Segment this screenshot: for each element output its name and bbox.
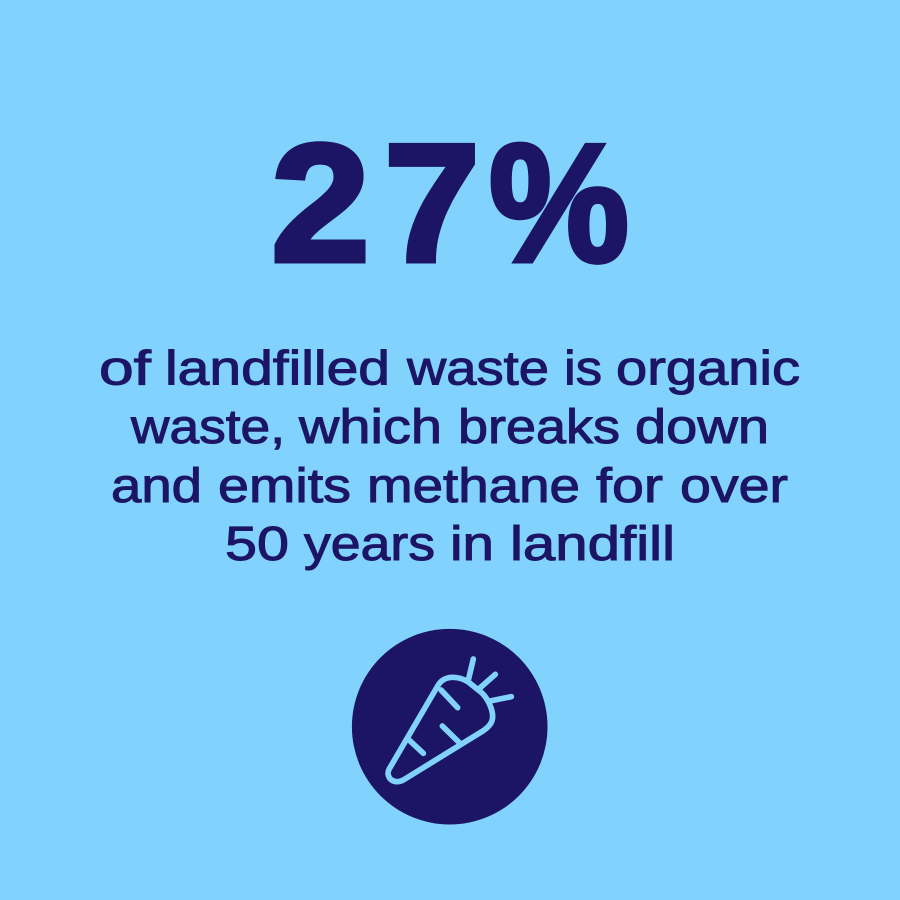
description text block: waste [406,342,549,396]
description text block: over [680,460,788,513]
description text block: years [304,518,435,571]
headline statistic: 27% [271,109,629,297]
description text block: landfill [510,518,675,571]
headline statistic: 27%: 2 [271,109,370,297]
description text block [99,342,800,571]
description text block: emits [218,460,351,513]
icon background circle [352,629,548,824]
carrot outline [388,659,511,782]
description text block: breaks [458,401,620,454]
headline statistic: 27%: % [489,109,629,297]
description text block: landfilled [165,342,390,396]
description text block: methane [367,460,580,513]
description text block: 50 [225,518,289,571]
description text block: which [298,401,442,454]
description text block: in [450,518,494,571]
description text block: waste, [130,401,285,454]
icon: carrot in circle [352,629,548,824]
description text block: down [635,401,769,454]
description text block: organic [616,342,800,396]
description text block: is [564,342,602,396]
description text block: for [596,460,663,513]
description text block: of [99,342,152,396]
description text block: and [111,460,202,513]
headline statistic: 27%: 7 [384,109,480,297]
